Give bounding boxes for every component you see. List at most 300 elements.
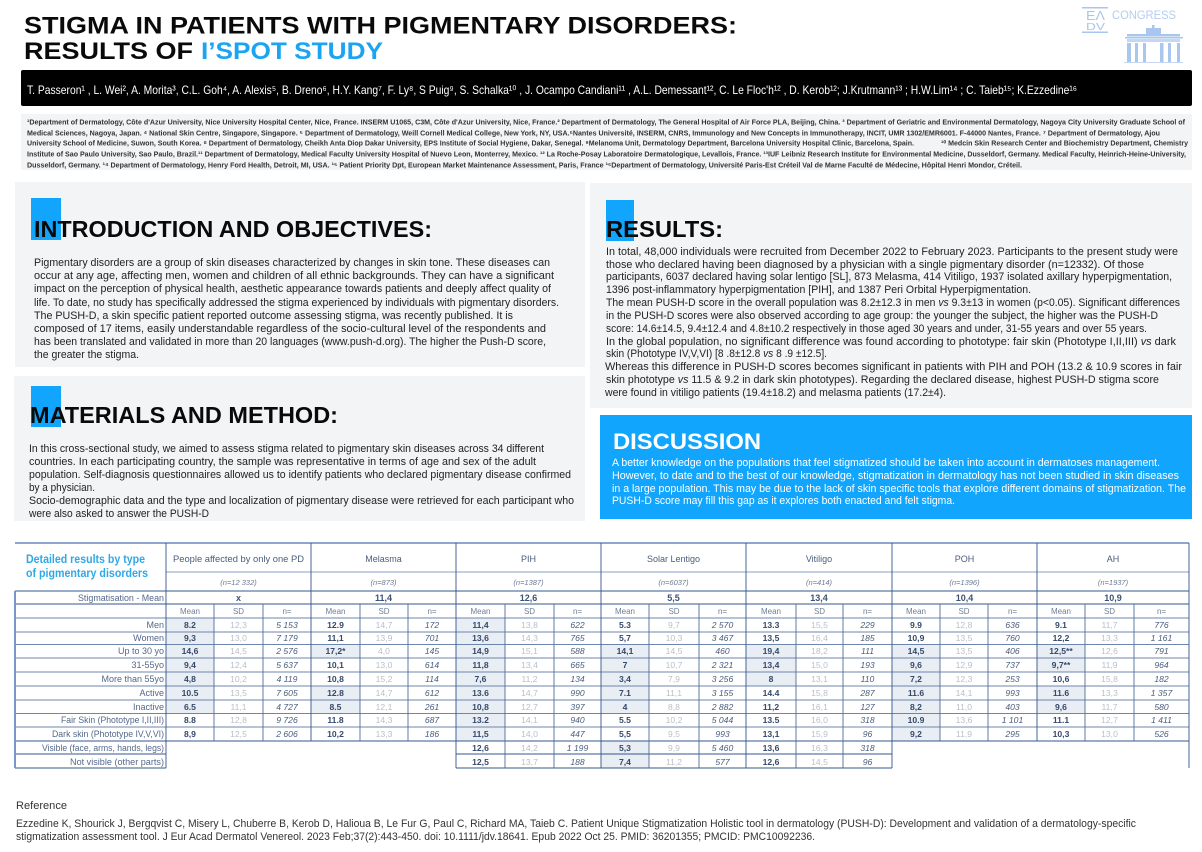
panel: results: were found in vitiligo patients (19.4±18.2) and melasma patients (17.2±4). — [604, 387, 946, 399]
table row: inactive — [133, 702, 1169, 712]
table row: fair skin: 13.2 — [472, 715, 489, 725]
panel: results: RESULTS: — [606, 216, 723, 242]
table cell shading — [166, 618, 1085, 768]
table row: up to 30 yo — [118, 646, 1169, 656]
table row: men: 13,8 — [521, 620, 538, 630]
table row: inactive: 16,1 — [811, 702, 828, 712]
title: STIGMA IN PATIENTS WITH PIGMENTARY DISORDERS: — [24, 12, 737, 40]
panel: introduction and objectives: occur at any age, affecting men, women and children of all ethnic backgrounds. They can have a significant — [34, 270, 555, 282]
table row: men: 776 — [1154, 620, 1169, 630]
table row: women: 3 467 — [712, 633, 734, 643]
table row: inactive: 11,1 — [230, 702, 247, 712]
table row: column headings: SD — [668, 607, 680, 616]
table row: inactive: 10,8 — [472, 702, 489, 712]
logo: EADV congress — [1082, 7, 1183, 63]
table row: dark skin: 12,5 — [230, 729, 247, 739]
table row: stigmatisation mean: 10,9 — [1104, 593, 1122, 603]
table row: up to 30 yo: 14,5 — [908, 646, 925, 656]
table row: inactive: 580 — [1154, 702, 1169, 712]
table row: visible: 13,6 — [763, 743, 780, 753]
table row: men: 8.2 — [184, 620, 196, 630]
table row: dark skin: 11,5 — [472, 729, 489, 739]
table row: men: 11,7 — [1101, 620, 1118, 630]
table row: 31-55yo: 13,4 — [763, 660, 780, 670]
table row: 31-55yo: 9,4 — [184, 660, 196, 670]
table row: dark skin: 13,3 — [376, 729, 393, 739]
table header row: (n=1396) — [949, 578, 980, 587]
table row: men: 9.9 — [910, 620, 922, 630]
table row: visible: 5,3 — [619, 743, 631, 753]
table row: visible: 12,6 — [472, 743, 489, 753]
table row: up to 30 yo: 18,2 — [811, 646, 828, 656]
table row: inactive: 12,7 — [521, 702, 538, 712]
table row: dark skin — [52, 729, 1169, 739]
table row: up to 30 yo: 19,4 — [763, 646, 780, 656]
table row: dark skin: 447 — [570, 729, 586, 739]
table row: women: 10,3 — [666, 633, 683, 643]
logo: EADV congress: DV — [1086, 21, 1105, 33]
table row: men: 12.9 — [327, 620, 344, 630]
table row: active: 14,7 — [521, 688, 538, 698]
table row: column headings: SD — [378, 607, 390, 616]
table row: dark skin: Dark skin (Phototype IV,V,VI) — [52, 729, 164, 739]
table row: active: 12.8 — [327, 688, 344, 698]
table row: fair skin: 9 726 — [276, 715, 298, 725]
table row: inactive: 11,0 — [956, 702, 972, 712]
table row: men: 9.1 — [1055, 620, 1067, 630]
table row: stigmatisation mean: 13,4 — [810, 593, 828, 603]
table row: 31-55yo — [131, 660, 1169, 670]
table row: more than 55yo: 182 — [1154, 674, 1169, 684]
panel: discussion: DISCUSSION — [613, 429, 761, 454]
table row: up to 30 yo: 791 — [1154, 646, 1169, 656]
table row: up to 30 yo: 145 — [425, 646, 439, 656]
table row: stigmatisation mean: 12,6 — [520, 593, 537, 603]
table row: more than 55yo: 7,6 — [475, 674, 487, 684]
table row: up to 30 yo: 111 — [861, 646, 874, 656]
table row: not visible: Not visible (other parts) — [70, 757, 164, 767]
table row: column headings: Mean — [615, 607, 635, 616]
table row: women: 14,3 — [521, 633, 538, 643]
affiliations panel: Medical Sciences, Nagoya, Japan. ⁴ National Skin Centre, Singapore, Singapore. ⁵ Department of Dermatology, Weill Cornell Medical College, New York, NY, USA.⁶Nantes Université, INSERM, CNRS, Immunology and New Concepts in Immunotherapy, INCIT, UMR 1302/EMR6001. F-44000 Nantes, France. ⁷ Department of Dermatology, Ajou — [27, 128, 1160, 138]
table row: fair skin: 687 — [425, 715, 440, 725]
panel: materials and method: In this cross-sectional study, we aimed to assess stigma related to pigmentary skin diseases across 34 different — [29, 443, 545, 455]
reference: stigmatization assessment tool. J Eur Acad Dermatol Venereol. 2023 Feb;37(2):443-450. doi: 10.1111/jdv.18641. Epub 2022 Oct 25. PMID: 36201355; PMCID: PMC10092236. — [16, 831, 815, 843]
table row: more than 55yo: 3,4 — [619, 674, 631, 684]
table row: dark skin: 96 — [863, 729, 872, 739]
table row: dark skin: 993 — [715, 729, 730, 739]
table row: up to 30 yo: Up to 30 yo — [118, 646, 164, 656]
table row: active: 612 — [425, 688, 439, 698]
table row: dark skin: 186 — [425, 729, 439, 739]
table row: column headings: SD — [233, 607, 244, 616]
table row: inactive: 403 — [1005, 702, 1020, 712]
table row: column headings: Mean — [180, 607, 200, 616]
table row: stigmatisation mean: 10,4 — [956, 593, 973, 603]
table row: active: 11.6 — [1053, 688, 1069, 698]
table row: active: 13,5 — [230, 688, 247, 698]
table row: 31-55yo: 9,6 — [910, 660, 922, 670]
table row: 31-55yo: 13,0 — [376, 660, 393, 670]
table row: dark skin: 526 — [1154, 729, 1169, 739]
table row: fair skin: 5.5 — [619, 715, 631, 725]
table header row: (n=873) — [370, 578, 397, 587]
table row: 31-55yo: 7 — [623, 660, 628, 670]
table row: not visible — [70, 757, 872, 767]
table row: women: 760 — [1005, 633, 1020, 643]
table row: women — [133, 633, 1172, 643]
table row: inactive: 2 882 — [711, 702, 733, 712]
table row: 31-55yo: 15,0 — [811, 660, 828, 670]
table row: fair skin — [61, 715, 1172, 725]
results table — [15, 543, 1189, 768]
table grid lines — [15, 543, 1189, 768]
table row: women: 185 — [860, 633, 875, 643]
table row: not visible: 7,4 — [619, 757, 631, 767]
affiliations panel — [21, 114, 1192, 170]
table row: stigmatisation mean: Stigmatisation - Mean — [78, 593, 164, 603]
table row: dark skin: 295 — [1004, 729, 1020, 739]
table row: not visible: 13,7 — [521, 757, 538, 767]
table row: column headings: SD — [1104, 607, 1115, 616]
table row: up to 30 yo: 12,6 — [1101, 646, 1118, 656]
table row: men: Men — [146, 620, 164, 630]
table row: column headings: n= — [863, 607, 872, 616]
table row: column headings: n= — [573, 607, 582, 616]
reference — [16, 800, 1137, 843]
table row: not visible: 14,5 — [811, 757, 828, 767]
table row: more than 55yo: 253 — [1004, 674, 1020, 684]
panel: materials and method: Socio-demographic data and the type and localization of pigmentary disease were retrieved for each participant who — [29, 495, 574, 507]
table row: more than 55yo: 10,6 — [1053, 674, 1070, 684]
table row: fair skin: 13.5 — [763, 715, 780, 725]
table row: active: 11.6 — [908, 688, 924, 698]
table row: more than 55yo: 8 — [769, 674, 774, 684]
table row: up to 30 yo: 406 — [1005, 646, 1020, 656]
table row: inactive: 11,7 — [1101, 702, 1118, 712]
panel: materials and method — [14, 376, 585, 521]
table row: men: 636 — [1005, 620, 1020, 630]
table row: more than 55yo: 7,2 — [910, 674, 922, 684]
table row: inactive: 4 727 — [276, 702, 299, 712]
table row: up to 30 yo: 13,5 — [956, 646, 973, 656]
table row: more than 55yo: 110 — [861, 674, 875, 684]
table title: of pigmentary disorders — [26, 568, 148, 580]
table row: 31-55yo: 964 — [1154, 660, 1169, 670]
table row: up to 30 yo: 4,0 — [378, 646, 390, 656]
table row: more than 55yo: 10,8 — [327, 674, 344, 684]
table row: inactive: 8,2 — [910, 702, 922, 712]
table row: visible: 318 — [860, 743, 875, 753]
table row: column headings: Mean — [325, 607, 346, 616]
table row: women: 11,1 — [327, 633, 344, 643]
table row: inactive: 8,8 — [668, 702, 680, 712]
table row: fair skin: 11.1 — [1053, 715, 1069, 725]
affiliations panel: ¹⁰ Medcin Skin Research Center and Biochemistry Department, Chemistry — [941, 138, 1188, 148]
table header row: People affected by only one PD — [173, 554, 305, 564]
logo: EADV congress: CONGRESS — [1112, 10, 1176, 22]
table row: 31-55yo: 614 — [425, 660, 439, 670]
panel: results: in the PUSH-D scores were also observed according to age group: the younger the subject, the higher was the PUSH-D — [606, 310, 1158, 322]
table row: fair skin: 13,6 — [956, 715, 973, 725]
table row: more than 55yo: 15,2 — [376, 674, 393, 684]
table row: fair skin: 11.8 — [327, 715, 344, 725]
table row: dark skin: 11,9 — [956, 729, 972, 739]
table row: column headings: Mean — [1051, 607, 1071, 616]
table row: fair skin: 12,8 — [230, 715, 247, 725]
table row: column headings: n= — [282, 607, 292, 616]
table row: more than 55yo: 134 — [570, 674, 585, 684]
table row: men: 11,4 — [472, 620, 489, 630]
panel: results: participants, 6037 declared having solar lentigo [SL], 873 Melasma, 414 Vitiligo, 1937 isolated axillary hyperpigmentation, — [606, 271, 1172, 283]
table row: fair skin: 12,7 — [1101, 715, 1118, 725]
table row: dark skin: 15,9 — [811, 729, 828, 739]
table row: active: 3 155 — [712, 688, 733, 698]
panel: materials and method: countries. In each participating country, the sample was representative in terms of age and sex of the adult — [29, 456, 537, 468]
panel: discussion: A better knowledge on the populations that feel stigmatized should be taken into account in dermatoses management. — [612, 457, 1160, 469]
table header row: (n=1387) — [513, 578, 544, 587]
table row: women: 13,5 — [763, 633, 780, 643]
table row: men: 14,7 — [376, 620, 393, 630]
table row: fair skin: 5 044 — [712, 715, 733, 725]
panel: results: 1396 post-inflammatory hyperpigmentation [PIH], and 1387 Peri Orbital Hyperpigmentation. — [606, 284, 1031, 296]
table row: fair skin: 16,0 — [811, 715, 828, 725]
table row: column headings: Mean — [470, 607, 491, 616]
table row: stigmatisation mean: x — [236, 593, 241, 603]
table row: active: 15,8 — [811, 688, 828, 698]
table row: more than 55yo: More than 55yo — [101, 674, 164, 684]
table row: 31-55yo: 9,7** — [1052, 660, 1071, 670]
table header row: Solar Lentigo — [647, 554, 700, 564]
table row: men: 172 — [425, 620, 439, 630]
table row: column headings: SD — [524, 607, 535, 616]
table row: women: 9,3 — [184, 633, 196, 643]
table row: fair skin: 8.8 — [184, 715, 196, 725]
table row: women: 1 161 — [1151, 633, 1172, 643]
table row: men: 15,5 — [811, 620, 828, 630]
table row: stigmatisation mean: 11,4 — [375, 593, 392, 603]
table row: not visible: 11,2 — [666, 757, 682, 767]
table row: up to 30 yo: 14,1 — [617, 646, 634, 656]
table row: men: 5.3 — [619, 620, 631, 630]
table row: up to 30 yo: 2 576 — [275, 646, 298, 656]
table row: more than 55yo: 12,3 — [956, 674, 973, 684]
table row: fair skin: 10,2 — [666, 715, 683, 725]
table row: active: 287 — [859, 688, 876, 698]
table row: women: 701 — [425, 633, 439, 643]
table row: active: 13.6 — [472, 688, 489, 698]
table row: dark skin: 2 606 — [275, 729, 298, 739]
table row: fair skin: 14,1 — [521, 715, 538, 725]
table header row — [173, 554, 1129, 587]
table row: 31-55yo: 31-55yo — [131, 660, 164, 670]
table row: inactive: 9,6 — [1055, 702, 1067, 712]
table row: active: 7 605 — [276, 688, 298, 698]
table row: active: 990 — [570, 688, 585, 698]
table row: more than 55yo: 4 119 — [277, 674, 298, 684]
table row: more than 55yo — [101, 674, 1169, 684]
panel: results: score: 14.6±14.5, 9.4±12.4 and 4.8±10.2 respectively in those aged 30 years and under, 31-55 years and over 55 years. — [606, 323, 1147, 335]
panel: discussion: However, to date and to the best of our knowledge, stigmatization in dermatology has not been studied in skin diseases — [612, 470, 1179, 482]
table row: more than 55yo: 10,2 — [230, 674, 247, 684]
panel: results: skin (Phototype IV,V,VI) [8 .8±12.8 vs 8 .9 ±12.5]. — [606, 348, 827, 360]
table row: women: 10,9 — [908, 633, 925, 643]
affiliations panel: Institute of Sao Paulo University, Sao Paulo, Brazil.¹¹ Department of Dermatology, Medical Faculty University Hospital of Nuevo Leon, Monterrey, Mexico. ¹² La Roche-Posay Laboratoire Dermatologique, Levallois, France. ¹³IUF Leibniz Research Institute for Environmental Medicine, Dusseldorf, Germany. Medical Faculty, Heinrich-Heine-University, — [27, 150, 1186, 158]
panel: results: Whereas this difference in PUSH-D scores becomes significant in patients with PIH and POH (13.2 & 10.9 scores in fair — [605, 361, 1182, 373]
table row: 31-55yo: 10,1 — [327, 660, 344, 670]
table row: women: 13,6 — [472, 633, 489, 643]
table row: active — [139, 688, 1173, 698]
reference: Ezzedine K, Shourick J, Bergqvist C, Misery L, Chuberre B, Kerob D, Halioua B, Le Fur G, Paul C, Richard MA, Taieb C. Patient Unique Stigmatization Holistic tool in dermatology (PUSH-D): Development and validation of a dermatology-specific — [16, 818, 1137, 830]
table row: women: 13,9 — [376, 633, 393, 643]
table row: dark skin: 8,9 — [184, 729, 196, 739]
panel: introduction and objectives: The PUSH-D, a skin specific patient reported outcome assessing stigma, was recently published. It is — [34, 310, 513, 322]
table row: dark skin: 10,2 — [327, 729, 344, 739]
table row: visible — [42, 743, 875, 753]
affiliations panel: University School of Medicine, Suwon, South Korea. ⁸ Department of Dermatology, Cheikh Anta Diop Dakar University, EPS Institute of Social Hygiene, Dakar, Senegal. ⁹Melanoma Unit, Dermatology Department, Barcelona University Hospital Clinic, Barcelona, Spain. — [27, 138, 914, 148]
table header row: (n=12 332) — [220, 578, 257, 587]
table row: 31-55yo: 12,9 — [956, 660, 973, 670]
table row: inactive: 6.5 — [184, 702, 196, 712]
table row: column headings: SD — [958, 607, 970, 616]
table row: men: 9,7 — [668, 620, 680, 630]
table row: visible: Visible (face, arms, hands, legs) — [42, 743, 164, 753]
table row: more than 55yo: 4,8 — [184, 674, 196, 684]
table row: visible: 14,2 — [521, 743, 538, 753]
table row: women: 13,3 — [1101, 633, 1118, 643]
table row: fair skin: 318 — [860, 715, 875, 725]
panel: materials and method: were also asked to answer the PUSH-D — [28, 508, 209, 520]
table row: not visible: 577 — [715, 757, 731, 767]
table row: up to 30 yo: 12,5** — [1049, 646, 1073, 656]
table row: active: Active — [139, 688, 164, 698]
panel: materials and method: by a physician. — [29, 482, 95, 494]
table row: fair skin: Fair Skin (Phototype I,II,III) — [61, 715, 164, 725]
table row: more than 55yo: 7,9 — [668, 674, 680, 684]
panel: results: The mean PUSH-D score in the overall population was 8.2±12.3 in men vs 9.3±13 in women (p<0.05). Significant differences — [606, 297, 1180, 309]
table row: up to 30 yo: 14,9 — [472, 646, 489, 656]
table row: 31-55yo: 13,4 — [521, 660, 538, 670]
table row: 31-55yo: 5 637 — [276, 660, 299, 670]
table row: more than 55yo: 15,8 — [1101, 674, 1118, 684]
reference: Reference — [16, 800, 67, 812]
table row: more than 55yo: 13,1 — [811, 674, 828, 684]
table row: active: 14,7 — [376, 688, 393, 698]
table row: up to 30 yo: 588 — [570, 646, 585, 656]
table row: women: 7 179 — [276, 633, 298, 643]
table row: inactive: 127 — [860, 702, 876, 712]
table row: fair skin: 14,3 — [376, 715, 393, 725]
table header row: PIH — [521, 554, 536, 564]
table row: women: 5,7 — [619, 633, 631, 643]
table header row: AH — [1107, 554, 1119, 564]
table row: more than 55yo: 114 — [425, 674, 439, 684]
table row: active: 993 — [1005, 688, 1020, 698]
table row: women: 13,5 — [956, 633, 973, 643]
table row: men: 5 153 — [276, 620, 298, 630]
panel: results: In total, 48,000 individuals were recruited from December 2022 to February 2023. Participants to the present study were — [606, 246, 1178, 258]
table row: men: 12,8 — [956, 620, 973, 630]
table row: up to 30 yo: 460 — [715, 646, 730, 656]
table row: inactive: 12,1 — [376, 702, 393, 712]
table row: 31-55yo: 11,9 — [1101, 660, 1118, 670]
table row: women: 12,2 — [1053, 633, 1070, 643]
panel: results: skin phototype vs 11.5 & 9.2 in dark skin phototypes). Regarding the declared disease, highest PUSH-D stigma score — [606, 374, 1159, 386]
table row: up to 30 yo: 14,6 — [182, 646, 199, 656]
table header row: POH — [955, 554, 974, 564]
table row: not visible: 96 — [863, 757, 872, 767]
table row: dark skin: 9,5 — [668, 729, 680, 739]
table row: up to 30 yo: 14,5 — [666, 646, 683, 656]
table row: more than 55yo: 11,2 — [521, 674, 538, 684]
panel: results — [590, 183, 1192, 408]
panel: results: those who declared having been diagnosed by a physician with a single pigmentary disorder (n=12332). Of those — [606, 259, 1144, 271]
table row: column headings: n= — [427, 607, 437, 616]
panel: introduction and objectives: the greater the stigma. — [34, 349, 139, 361]
title: I’SPOT STUDY — [201, 38, 383, 65]
table row: 31-55yo: 193 — [860, 660, 875, 670]
panel: introduction and objectives: INTRODUCTION AND OBJECTIVES: — [34, 216, 432, 242]
table row: more than 55yo: 3 256 — [712, 674, 733, 684]
table row: stigmatisation mean: 5,5 — [667, 593, 680, 603]
table row: women: Women — [133, 633, 164, 643]
panel: introduction and objectives: Pigmentary disorders are a group of skin diseases characterized by changes in skin tone. These diseases can — [34, 257, 550, 269]
table row: column headings: n= — [718, 607, 727, 616]
affiliations panel: Dusseldorf, Germany. ¹⁴ Department of Dermatology, Henry Ford Health, Detroit, MI, USA. ¹⁵ Patient Priority Dpt, European Market Maintenance Assessment, Paris, France ¹⁶Department of Dermatology, Université Paris-Est Créteil Val de Marne Faculté de Médecine, Hôpital Henri Mondor, Créteil. — [27, 160, 1022, 170]
panel: discussion: PUSH-D score may fill this gap as it explores both enacted and felt stigma. — [612, 495, 955, 507]
table row: stigmatisation mean — [78, 593, 1122, 603]
table row: 31-55yo: 11,8 — [472, 660, 489, 670]
table row: inactive: 261 — [424, 702, 439, 712]
table row: dark skin: 5,5 — [619, 729, 631, 739]
panel: discussion — [600, 415, 1192, 519]
table header row: Melasma — [365, 554, 402, 564]
table row: dark skin: 9,2 — [910, 729, 922, 739]
table row: dark skin: 10,3 — [1053, 729, 1070, 739]
panel: results: In the global population, no significant difference was found according to phototype: fair skin (Phototype I,II,III) vs dark — [606, 336, 1176, 348]
table row: active: 1 357 — [1151, 688, 1173, 698]
table row: 31-55yo: 10,7 — [666, 660, 683, 670]
table row: active: 7.1 — [619, 688, 631, 698]
table row: fair skin: 1 411 — [1151, 715, 1172, 725]
table row: inactive: 8.5 — [330, 702, 342, 712]
table row: not visible: 188 — [570, 757, 585, 767]
table row: fair skin: 10.9 — [908, 715, 925, 725]
table row: men: 13.3 — [763, 620, 780, 630]
table header row: (n=1937) — [1098, 578, 1129, 587]
table row: women: 16,4 — [811, 633, 828, 643]
table row: column headings — [180, 607, 1166, 616]
table header row: Vitiligo — [806, 554, 832, 564]
table row: men — [146, 620, 1169, 630]
table title: Detailed results by type — [26, 554, 145, 566]
table row: column headings: SD — [814, 607, 825, 616]
table row: active: 11,1 — [666, 688, 682, 698]
table row: inactive: 4 — [623, 702, 628, 712]
table row: 31-55yo: 665 — [570, 660, 585, 670]
table row: men: 2 570 — [711, 620, 733, 630]
table row: up to 30 yo: 15,1 — [521, 646, 538, 656]
table header row: (n=414) — [806, 578, 833, 587]
table row: visible: 16,3 — [811, 743, 828, 753]
table row: not visible: 12,5 — [472, 757, 489, 767]
logo: EADV congress: EΛ — [1086, 9, 1106, 23]
table row: men: 12,3 — [230, 620, 247, 630]
table row: active: 14.4 — [763, 688, 780, 698]
table row: men: 229 — [859, 620, 875, 630]
title: RESULTS OF — [24, 38, 193, 65]
panel: introduction and objectives — [15, 182, 585, 367]
